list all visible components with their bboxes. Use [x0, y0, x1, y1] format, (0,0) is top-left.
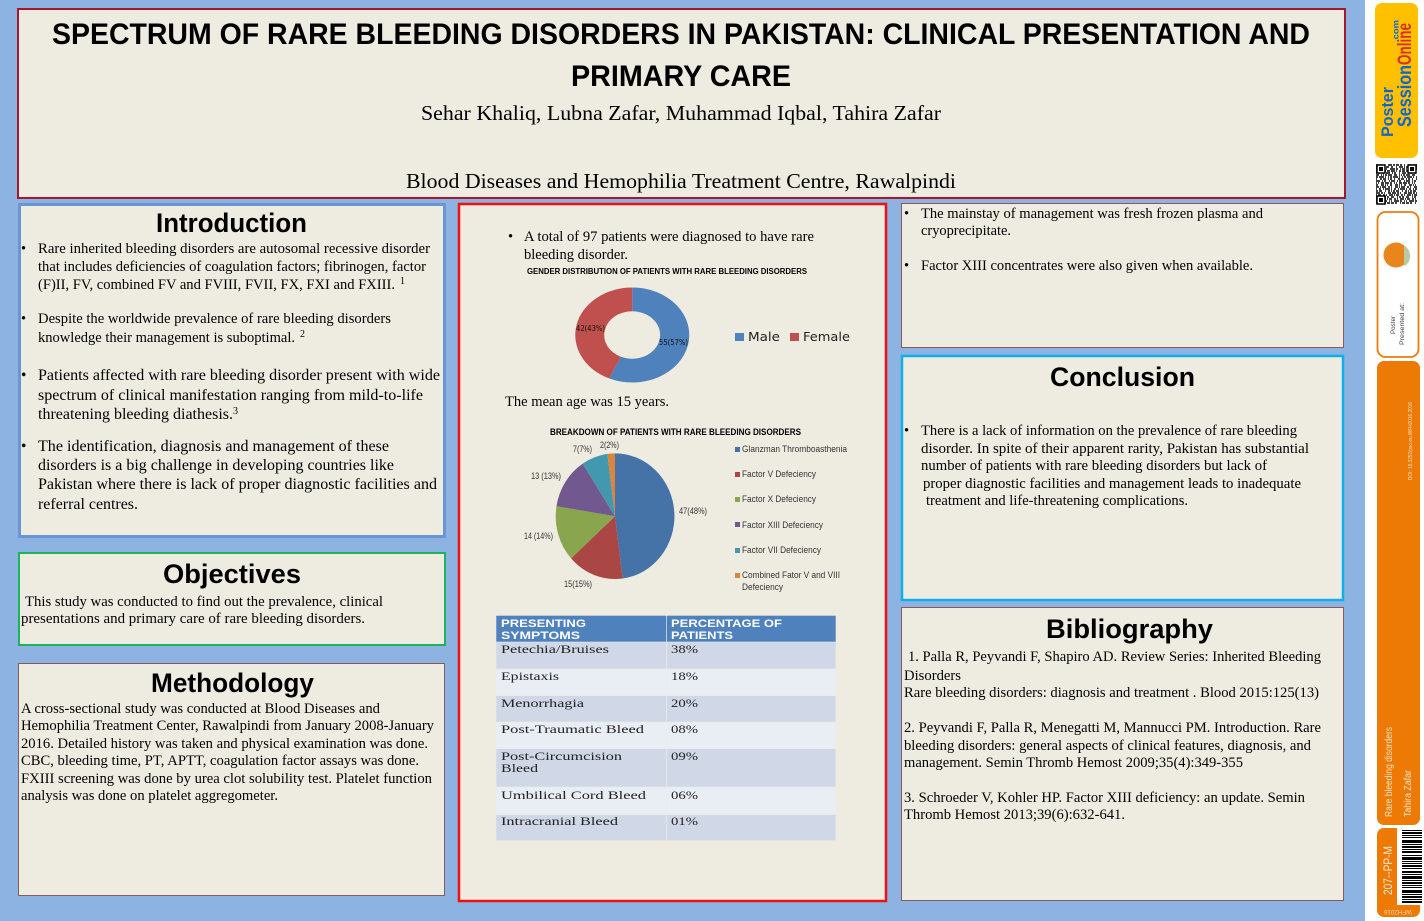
sidebar: logo: Online	[1395, 23, 1416, 65]
pie legend	[735, 444, 847, 592]
table rows: Post-Circumcision	[501, 751, 622, 763]
methodology text: CBC, bleeding time, PT, APTT, coagulation factor assays was done.	[21, 753, 419, 769]
references: Rare bleeding disorders: diagnosis and treatment . Blood 2015:125(13)	[904, 685, 1319, 701]
references: 1. Palla R, Peyvandi F, Shapiro AD. Review Series: Inherited Bleeding	[908, 649, 1321, 665]
introduction bullets: Despite the worldwide prevalence of rare bleeding disorders	[38, 311, 391, 327]
sidebar: QR code	[1376, 164, 1417, 205]
table rows: 09%	[671, 751, 699, 763]
table rows: Petechia/Bruises	[501, 644, 610, 656]
results intro bullet: A total of 97 patients were diagnosed to have rare	[524, 229, 814, 245]
legend: Female	[803, 329, 850, 344]
references: management. Semin Thromb Hemost 2009;35(4):349-355	[904, 755, 1243, 771]
authors: Sehar Khaliq, Lubna Zafar, Muhammad Iqbal, Tahira Zafar	[421, 101, 941, 125]
table rows: Bleed	[501, 763, 538, 775]
pie legend: Combined Fator V and VIII	[742, 570, 840, 580]
chart title: GENDER DISTRIBUTION OF PATIENTS WITH RARE BLEEDING DISORDERS	[527, 267, 808, 276]
objectives text: This study was conducted to find out the prevalence, clinical	[25, 594, 383, 610]
presented at text	[1390, 303, 1406, 345]
sidebar: orange title bar: Rare bleeding disorders	[1384, 727, 1395, 817]
sidebar: poster code and barcode: WFH2016	[1384, 908, 1412, 915]
pie data labels: 47(48%)	[679, 506, 707, 516]
pie data labels: 7(7%)	[573, 444, 592, 454]
conclusion text: •	[904, 423, 909, 439]
data labels: 42(43%)	[576, 324, 605, 333]
pie slices	[556, 453, 674, 579]
results intro bullet	[508, 229, 814, 263]
pie data labels	[524, 440, 707, 589]
table rows: 01%	[671, 816, 699, 828]
introduction bullets: Rare inherited bleeding disorders are autosomal recessive disorder	[38, 241, 430, 257]
objectives text	[21, 594, 383, 627]
introduction bullets: Pakistan where there is lack of proper diagnostic facilities and	[38, 476, 437, 493]
references	[904, 649, 1321, 823]
presented at text: Presented at:	[1399, 303, 1406, 345]
table header: PERCENTAGE OF	[671, 618, 782, 630]
management bullets: The mainstay of management was fresh frozen plasma and	[921, 206, 1264, 222]
introduction bullets: •	[21, 438, 26, 455]
chart title: BREAKDOWN OF PATIENTS WITH RARE BLEEDING DISORDERS	[550, 427, 801, 437]
table rows: Umbilical Cord Bleed	[501, 790, 646, 802]
table rows: Menorrhagia	[501, 698, 584, 710]
data labels: 55(57%)	[659, 338, 688, 347]
conclusion text	[904, 423, 1309, 509]
panel: management	[902, 204, 1344, 348]
legend: Male	[748, 329, 780, 344]
sidebar: logo: .com	[1392, 20, 1400, 42]
panel: methodology	[18, 664, 444, 896]
heading: poster title: PRIMARY CARE	[571, 60, 791, 93]
sidebar: logo: Session	[1395, 65, 1416, 127]
pie legend: Factor XIII Defeciency	[742, 520, 823, 530]
sidebar: logo	[1375, 3, 1418, 158]
panel: title	[18, 9, 1345, 198]
pie legend: Factor V Defeciency	[742, 469, 816, 479]
heading: introduction: Introduction	[156, 208, 307, 238]
introduction bullets: 3	[233, 406, 238, 417]
introduction bullets: that includes deficiencies of coagulation factors; fibrinogen, factor	[38, 259, 426, 275]
table rows: 06%	[671, 790, 699, 802]
barcode	[1402, 830, 1422, 903]
methodology text	[21, 701, 435, 804]
introduction bullets: Patients affected with rare bleeding disorder present with wide	[38, 367, 440, 384]
references: 3. Schroeder V, Kohler HP. Factor XIII deficiency: an update. Semin	[904, 790, 1306, 806]
introduction bullets: 1	[400, 276, 405, 287]
donut slice: male	[609, 288, 689, 382]
results intro bullet: •	[508, 229, 513, 245]
heading: conclusion: Conclusion	[1050, 362, 1195, 392]
panel: bibliography	[902, 608, 1344, 900]
methodology text: Hemophilia Treatment Center, Rawalpindi from January 2008-January	[21, 718, 435, 734]
management bullets: •	[904, 206, 909, 222]
objectives text: presentations and primary care of rare bleeding disorders.	[21, 611, 365, 627]
donut slice: female	[575, 287, 632, 378]
sidebar: poster code and barcode: 207--PP-M	[1381, 846, 1395, 895]
references: Thromb Hemost 2013;39(6):632-641.	[904, 807, 1125, 823]
introduction bullets: 2	[300, 329, 305, 340]
conclusion text: proper diagnostic facilities and management leads to inadequate	[923, 476, 1301, 492]
references: 2. Peyvandi F, Palla R, Menegatti M, Mannucci PM. Introduction. Rare	[904, 720, 1321, 736]
presented at text: Poster	[1390, 315, 1397, 334]
introduction bullets: •	[21, 367, 26, 384]
introduction bullets: referral centres.	[38, 496, 138, 513]
methodology text: FXIII screening was done by urea clot solubility test. Platelet function	[21, 771, 433, 787]
pie data labels: 2(2%)	[600, 440, 619, 450]
pie legend: Factor X Defeciency	[742, 494, 816, 504]
conclusion text: disorder. In spite of their apparent rarity, Pakistan has substantial	[921, 441, 1309, 457]
table rows: Post-Traumatic Bleed	[501, 724, 644, 736]
table header: SYMPTOMS	[501, 630, 580, 642]
panel: objectives	[19, 553, 445, 645]
introduction bullets	[21, 241, 440, 513]
pie legend: Defeciency	[742, 582, 783, 592]
sidebar: logo: Poster	[1378, 87, 1397, 137]
heading: bibliography: Bibliography	[1046, 614, 1213, 644]
introduction bullets: knowledge their management is suboptimal.	[38, 330, 295, 346]
heading: poster title	[52, 18, 1310, 93]
conclusion text: number of patients with rare bleeding disorders but lack of	[921, 458, 1267, 474]
table header	[496, 616, 836, 642]
results intro bullet: bleeding disorder.	[524, 247, 628, 263]
references: bleeding disorders: general aspects of clinical features, diagnosis, and	[904, 738, 1312, 754]
panel: conclusion	[902, 356, 1343, 600]
introduction bullets: (F)II, FV, combined FV and FVIII, FVII, FX, FXI and FXIII.	[38, 277, 395, 293]
table header: PRESENTING	[501, 618, 586, 630]
introduction bullets: The identification, diagnosis and management of these	[38, 438, 389, 455]
pie legend: Glanzman Thromboasthenia	[742, 444, 847, 454]
management bullets	[904, 206, 1264, 274]
table rows: 20%	[671, 698, 699, 710]
affiliation: Blood Diseases and Hemophilia Treatment Centre, Rawalpindi	[406, 169, 956, 193]
table rows: Epistaxis	[501, 671, 560, 683]
sidebar: poster code and barcode	[1377, 828, 1424, 917]
pie data labels: 15(15%)	[564, 579, 592, 589]
table rows: 08%	[671, 724, 699, 736]
legend	[735, 329, 850, 344]
introduction bullets: disorders is a big challenge in developing countries like	[38, 457, 394, 474]
introduction bullets: •	[21, 241, 26, 257]
management bullets: cryoprecipitate.	[921, 223, 1011, 239]
table rows: Intracranial Bleed	[501, 816, 618, 828]
sidebar: orange title bar: Tahira Zafar	[1403, 769, 1414, 817]
heading: poster title: SPECTRUM OF RARE BLEEDING DISORDERS IN PAKISTAN: CLINICAL PRESENTATION AND	[52, 18, 1310, 51]
pie data labels: 14 (14%)	[524, 531, 553, 541]
pie legend: Factor VII Defeciency	[742, 545, 821, 555]
management bullets: •	[904, 258, 909, 274]
table header: PATIENTS	[671, 630, 733, 642]
methodology text: 2016. Detailed history was taken and physical examination was done.	[21, 736, 428, 752]
chart: breakdown pie	[524, 427, 847, 592]
mean age text: The mean age was 15 years.	[505, 394, 669, 410]
management bullets: Factor XIII concentrates were also given when available.	[921, 258, 1253, 274]
icon: congress logo	[1384, 242, 1410, 268]
panel: introduction	[20, 204, 444, 536]
table rows	[496, 642, 836, 840]
sidebar: orange title bar: DOI: 10.3252/pso.eu.WFH2016.2016	[1408, 402, 1414, 480]
conclusion text: There is a lack of information on the prevalence of rare bleeding	[921, 423, 1297, 439]
conclusion text: treatment and life-threatening complications.	[926, 493, 1188, 509]
sidebar: presented at card	[1378, 212, 1418, 357]
chart: gender donut	[527, 267, 850, 382]
table rows: 38%	[671, 644, 699, 656]
data labels	[576, 324, 688, 347]
methodology text: analysis was done on platelet aggregometer.	[21, 788, 278, 804]
heading: objectives: Objectives	[163, 559, 301, 589]
table: presenting symptoms	[496, 616, 836, 840]
table rows: 18%	[671, 671, 699, 683]
introduction bullets: •	[21, 311, 26, 327]
sidebar: orange title bar	[1377, 361, 1420, 825]
introduction bullets: spectrum of clinical manifestation ranging from mild-to-life	[38, 387, 423, 404]
panel: results	[459, 204, 886, 901]
methodology text: A cross-sectional study was conducted at Blood Diseases and	[21, 701, 381, 717]
references: Disorders	[904, 668, 961, 684]
introduction bullets: threatening bleeding diathesis.	[38, 406, 233, 423]
heading: methodology: Methodology	[151, 668, 314, 698]
pie data labels: 13 (13%)	[531, 471, 561, 481]
